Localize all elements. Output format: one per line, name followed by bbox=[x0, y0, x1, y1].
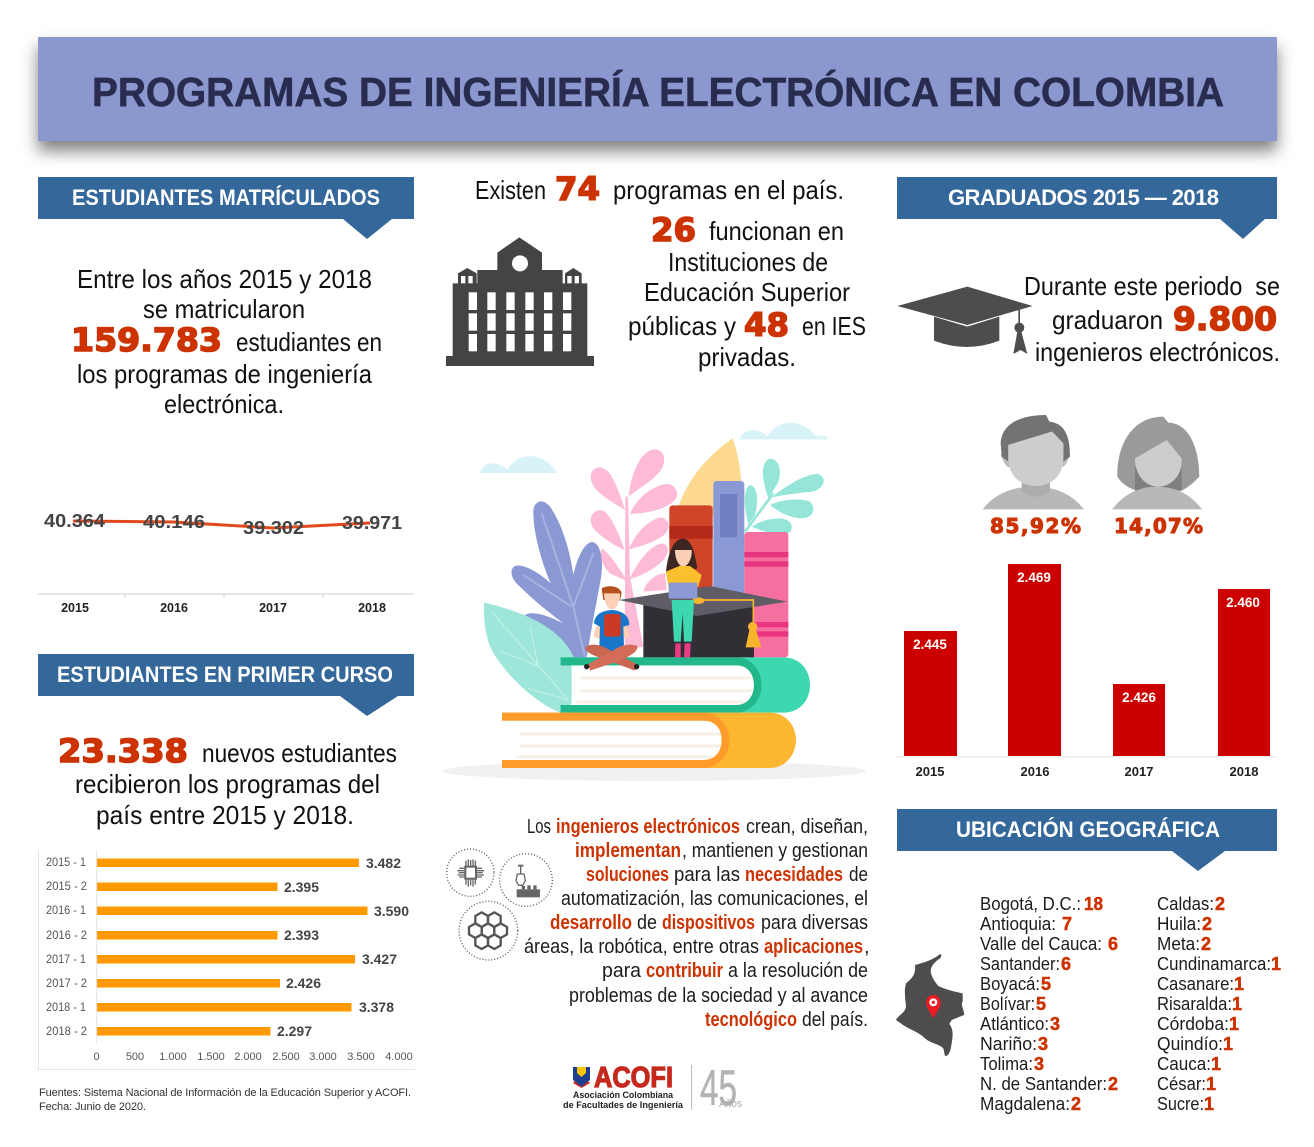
bar chart: graduados: 2.460 bbox=[1226, 595, 1260, 610]
bar chart: primer curso: 2017 - 1 bbox=[46, 952, 86, 966]
title: PROGRAMAS DE INGENIERÍA ELECTRÓNICA EN COLOMBIA bbox=[92, 69, 1224, 115]
source note: Fecha: Junio de 2020. bbox=[39, 1101, 146, 1113]
list: programas por departamento, columna 1: 3 bbox=[1034, 1054, 1044, 1074]
list: programas por departamento, columna 1: 18 bbox=[1084, 894, 1103, 914]
logo: ACOFI: de Facultades de Ingeniería bbox=[563, 1100, 684, 1111]
list: programas por departamento, columna 2: César: bbox=[1157, 1074, 1206, 1094]
text block: ingenieros electrónicos: problemas de la sociedad y al avance bbox=[569, 985, 868, 1007]
text block: matriculados: 159.783 bbox=[71, 321, 222, 359]
panel: graduados header: GRADUADOS 2015 — 2018 bbox=[948, 185, 1219, 210]
text block: graduados: graduaron bbox=[1052, 305, 1163, 335]
list: programas por departamento, columna 2: Meta: bbox=[1157, 934, 1200, 954]
list: programas por departamento, columna 1: Antioquia: bbox=[980, 914, 1056, 934]
text block: programas en el país: privadas. bbox=[698, 342, 796, 372]
text block: matriculados: Entre los años 2015 y 2018 bbox=[77, 264, 372, 294]
bar chart: primer curso: 2018 - 2 bbox=[46, 1024, 87, 1038]
text block: ingenieros electrónicos: crean, diseñan, bbox=[746, 816, 868, 838]
icon: graduation cap bbox=[897, 287, 1033, 354]
bar chart: graduados bbox=[897, 564, 1277, 779]
list: programas por departamento, columna 1: 2 bbox=[1108, 1074, 1118, 1094]
list: programas por departamento, columna 2: 1 bbox=[1271, 954, 1281, 974]
bar chart: primer curso: 500 bbox=[126, 1051, 144, 1063]
list: programas por departamento, columna 1: Bolívar: bbox=[980, 994, 1035, 1014]
bar chart: primer curso: 3.000 bbox=[309, 1051, 337, 1063]
source note bbox=[39, 1087, 411, 1113]
list: programas por departamento, columna 1: N. de Santander: bbox=[980, 1074, 1107, 1094]
bar chart: primer curso: 2018 - 1 bbox=[46, 1000, 86, 1014]
list: programas por departamento, columna 2: Risaralda: bbox=[1157, 994, 1232, 1014]
list: programas por departamento, columna 1: Magdalena: bbox=[980, 1094, 1070, 1114]
logo: ACOFI: 45 bbox=[700, 1060, 737, 1116]
panel: estudiantes matriculados header bbox=[38, 177, 414, 239]
list: programas por departamento, columna 2: 1 bbox=[1223, 1034, 1233, 1054]
line chart: matriculados: 2018 bbox=[358, 601, 386, 615]
text block: programas en el país: 48 bbox=[744, 306, 789, 344]
list: programas por departamento, columna 2: 2 bbox=[1201, 934, 1211, 954]
text block: programas en el país: públicas y bbox=[628, 311, 736, 341]
text block: matriculados: se matricularon bbox=[143, 294, 305, 324]
list: programas por departamento, columna 2: Quindío: bbox=[1157, 1034, 1223, 1054]
list: programas por departamento, columna 1: 3 bbox=[1050, 1014, 1060, 1034]
bar chart: primer curso: 2.297 bbox=[277, 1024, 312, 1039]
bar chart: graduados: 2015 bbox=[916, 764, 944, 779]
text block: ingenieros electrónicos bbox=[524, 816, 870, 1031]
list: programas por departamento, columna 1: Atlántico: bbox=[980, 1014, 1049, 1034]
list: programas por departamento, columna 1: Tolima: bbox=[980, 1054, 1033, 1074]
bar chart: primer curso: 3.427 bbox=[362, 952, 397, 967]
text block: matriculados bbox=[71, 264, 382, 419]
list: programas por departamento, columna 2: Caldas: bbox=[1157, 894, 1214, 914]
text block: ingenieros electrónicos: áreas, la robótica, entre otras bbox=[524, 936, 759, 958]
text block: ingenieros electrónicos: Los bbox=[527, 816, 551, 838]
text block: ingenieros electrónicos: , mantienen y gestionan bbox=[682, 840, 868, 862]
bar chart: primer curso: 1.000 bbox=[159, 1051, 187, 1063]
list: programas por departamento, columna 2: 1 bbox=[1206, 1074, 1216, 1094]
bar chart: primer curso: 2015 - 2 bbox=[46, 879, 87, 893]
bar chart: graduados: 2016 bbox=[1021, 764, 1049, 779]
text block: matriculados: los programas de ingeniería bbox=[77, 359, 372, 389]
text block: ingenieros electrónicos: ingenieros electrónicos bbox=[556, 816, 740, 838]
panel: graduados header bbox=[897, 177, 1277, 239]
list: programas por departamento, columna 2: Huila: bbox=[1157, 914, 1201, 934]
text block: programas en el país: Existen bbox=[475, 175, 546, 205]
text block: graduados: 9.800 bbox=[1173, 300, 1277, 338]
line chart: matriculados: 40.146 bbox=[143, 512, 205, 532]
text block: ingenieros electrónicos: de bbox=[849, 864, 868, 886]
bar chart: primer curso: 3.500 bbox=[347, 1051, 375, 1063]
list: programas por departamento, columna 2: 1 bbox=[1234, 974, 1244, 994]
text block: ingenieros electrónicos: a la resolución de bbox=[728, 960, 868, 982]
list: programas por departamento, columna 1: 2 bbox=[1071, 1094, 1081, 1114]
list: programas por departamento, columna 2: Cauca: bbox=[1157, 1054, 1211, 1074]
logo: ACOFI: Asociación Colombiana bbox=[573, 1090, 674, 1101]
panel: ubicación geográfica header: UBICACIÓN GEOGRÁFICA bbox=[956, 817, 1220, 842]
text block: graduados: Durante este periodo se bbox=[1024, 271, 1280, 301]
bar chart: primer curso: 2.393 bbox=[284, 928, 319, 943]
illustration: students on books bbox=[442, 423, 866, 781]
graduation cap bbox=[619, 586, 787, 657]
text block: graduados bbox=[1024, 271, 1280, 367]
bar chart: primer curso: 1.500 bbox=[197, 1051, 225, 1063]
bar chart: primer curso: 2.500 bbox=[272, 1051, 300, 1063]
text block: ingenieros electrónicos: para bbox=[602, 960, 642, 982]
title banner bbox=[38, 37, 1277, 141]
bar chart: graduados: 2017 bbox=[1125, 764, 1153, 779]
bar chart: primer curso: 2016 - 1 bbox=[46, 903, 86, 917]
text block: matriculados: estudiantes en bbox=[236, 327, 382, 357]
text block: programas en el país: Instituciones de bbox=[668, 247, 828, 277]
list: programas por departamento, columna 2: 1 bbox=[1229, 1014, 1239, 1034]
text block: ingenieros electrónicos: implementan bbox=[575, 840, 681, 862]
percentages: 85,92% bbox=[990, 514, 1081, 538]
list: programas por departamento, columna 2: Casanare: bbox=[1157, 974, 1234, 994]
text block: graduados: ingenieros electrónicos. bbox=[1035, 337, 1280, 367]
bar chart: primer curso: 2016 - 2 bbox=[46, 928, 87, 942]
list: programas por departamento, columna 1: 5 bbox=[1041, 974, 1051, 994]
list: programas por departamento, columna 2: 1 bbox=[1211, 1054, 1221, 1074]
bar chart: primer curso: 2.426 bbox=[286, 976, 321, 991]
panel: primer curso header bbox=[38, 654, 414, 716]
list: programas por departamento, columna 1: Valle del Cauca: bbox=[980, 934, 1102, 954]
person: girl with laptop bbox=[666, 539, 702, 657]
list: programas por departamento, columna 2: 2 bbox=[1202, 914, 1212, 934]
list: programas por departamento, columna 2: 2 bbox=[1215, 894, 1225, 914]
text block: ingenieros electrónicos: dispositivos bbox=[662, 912, 755, 934]
line chart: matriculados: 2017 bbox=[259, 601, 287, 615]
bar chart: graduados: 2.445 bbox=[913, 637, 947, 652]
text block: programas en el país: 26 bbox=[651, 211, 696, 249]
logo: ACOFI bbox=[563, 1060, 742, 1116]
bar chart: primer curso bbox=[38, 850, 415, 1070]
text block: ingenieros electrónicos: automatización, las comunicaciones, el bbox=[561, 888, 868, 910]
text block: programas en el país: en IES bbox=[802, 311, 866, 341]
source note: Fuentes: Sistema Nacional de Información de la Educación Superior y ACOFI. bbox=[39, 1087, 411, 1099]
icon: man bbox=[983, 415, 1084, 509]
bar chart: graduados: 2.426 bbox=[1122, 690, 1156, 705]
line chart: matriculados: 2016 bbox=[160, 601, 188, 615]
text block: programas en el país: 74 bbox=[555, 170, 600, 208]
list: programas por departamento, columna 1: Bogotá, D.C.: bbox=[980, 894, 1081, 914]
text block: ingenieros electrónicos: necesidades bbox=[745, 864, 843, 886]
bar chart: primer curso: 2.395 bbox=[284, 880, 319, 895]
text block: ingenieros electrónicos: del país. bbox=[802, 1009, 868, 1031]
line chart: matriculados: 39.971 bbox=[342, 513, 402, 533]
text block: ingenieros electrónicos: , bbox=[864, 936, 870, 958]
logo: ACOFI: ACOFI bbox=[594, 1062, 673, 1094]
text block: programas en el país: programas en el país. bbox=[613, 175, 844, 205]
bar chart: primer curso: 3.482 bbox=[366, 856, 401, 871]
line chart: matriculados bbox=[38, 511, 414, 615]
text block: ingenieros electrónicos: de bbox=[637, 912, 657, 934]
list: programas por departamento, columna 1 bbox=[980, 894, 1118, 1114]
logo: ACOFI: Años bbox=[719, 1098, 742, 1110]
list: programas por departamento, columna 1: 6 bbox=[1108, 934, 1118, 954]
bar chart: primer curso: 2017 - 2 bbox=[46, 976, 87, 990]
bar chart: graduados: 2018 bbox=[1230, 764, 1258, 779]
text block: primer curso: 23.338 bbox=[58, 732, 188, 770]
text block: programas en el país bbox=[475, 170, 866, 372]
list: programas por departamento, columna 1: Nariño: bbox=[980, 1034, 1037, 1054]
text block: primer curso: país entre 2015 y 2018. bbox=[96, 800, 354, 830]
list: programas por departamento, columna 1: 6 bbox=[1061, 954, 1071, 974]
text block: ingenieros electrónicos: para las bbox=[674, 864, 740, 886]
icons: chip, robot arm, graphene bbox=[447, 849, 552, 960]
text block: ingenieros electrónicos: contribuir bbox=[646, 960, 723, 982]
list: programas por departamento, columna 2 bbox=[1157, 894, 1281, 1114]
text block: primer curso: recibieron los programas del bbox=[75, 769, 380, 799]
line chart: matriculados: 39.302 bbox=[243, 518, 304, 538]
bar chart: primer curso: 3.378 bbox=[359, 1000, 394, 1015]
text block: primer curso bbox=[58, 732, 397, 830]
bar chart: primer curso: 2.000 bbox=[234, 1051, 262, 1063]
list: programas por departamento, columna 1: Boyacá: bbox=[980, 974, 1040, 994]
text block: matriculados: electrónica. bbox=[164, 389, 284, 419]
list: programas por departamento, columna 2: 1 bbox=[1232, 994, 1242, 1014]
list: programas por departamento, columna 1: 3 bbox=[1038, 1034, 1048, 1054]
map: Colombia bbox=[896, 954, 964, 1056]
percentages bbox=[990, 514, 1203, 538]
list: programas por departamento, columna 1: Santander: bbox=[980, 954, 1060, 974]
person: boy reading bbox=[584, 586, 639, 671]
text block: programas en el país: funcionan en bbox=[709, 216, 844, 246]
text block: programas en el país: Educación Superior bbox=[644, 277, 850, 307]
text block: primer curso: nuevos estudiantes bbox=[202, 738, 397, 768]
bar chart: graduados: 2.469 bbox=[1017, 570, 1051, 585]
list: programas por departamento, columna 1: 7 bbox=[1062, 914, 1072, 934]
text block: ingenieros electrónicos: desarrollo bbox=[550, 912, 632, 934]
percentages: 14,07% bbox=[1114, 514, 1203, 538]
list: programas por departamento, columna 2: Sucre: bbox=[1157, 1094, 1204, 1114]
panel: primer curso header: ESTUDIANTES EN PRIMER CURSO bbox=[57, 662, 393, 687]
list: programas por departamento, columna 2: 1 bbox=[1204, 1094, 1214, 1114]
bar chart: primer curso: 4.000 bbox=[385, 1051, 413, 1063]
list: programas por departamento, columna 2: Cundinamarca: bbox=[1157, 954, 1271, 974]
panel: estudiantes matriculados header: ESTUDIANTES MATRÍCULADOS bbox=[72, 185, 380, 210]
list: programas por departamento, columna 1: 5 bbox=[1036, 994, 1046, 1014]
text block: ingenieros electrónicos: para diversas bbox=[761, 912, 868, 934]
icon: woman bbox=[1112, 417, 1202, 509]
bar chart: primer curso: 3.590 bbox=[374, 904, 409, 919]
panel: ubicación geográfica header bbox=[897, 809, 1277, 871]
line chart: matriculados: 2015 bbox=[61, 601, 89, 615]
text block: ingenieros electrónicos: soluciones bbox=[586, 864, 669, 886]
icon: university building bbox=[446, 237, 594, 366]
text block: ingenieros electrónicos: tecnológico bbox=[705, 1009, 797, 1031]
list: programas por departamento, columna 2: Córdoba: bbox=[1157, 1014, 1229, 1034]
line chart: matriculados: 40.364 bbox=[44, 511, 105, 531]
bar chart: primer curso: 2015 - 1 bbox=[46, 855, 86, 869]
bar chart: primer curso: 0 bbox=[93, 1051, 100, 1063]
text block: ingenieros electrónicos: aplicaciones bbox=[764, 936, 863, 958]
